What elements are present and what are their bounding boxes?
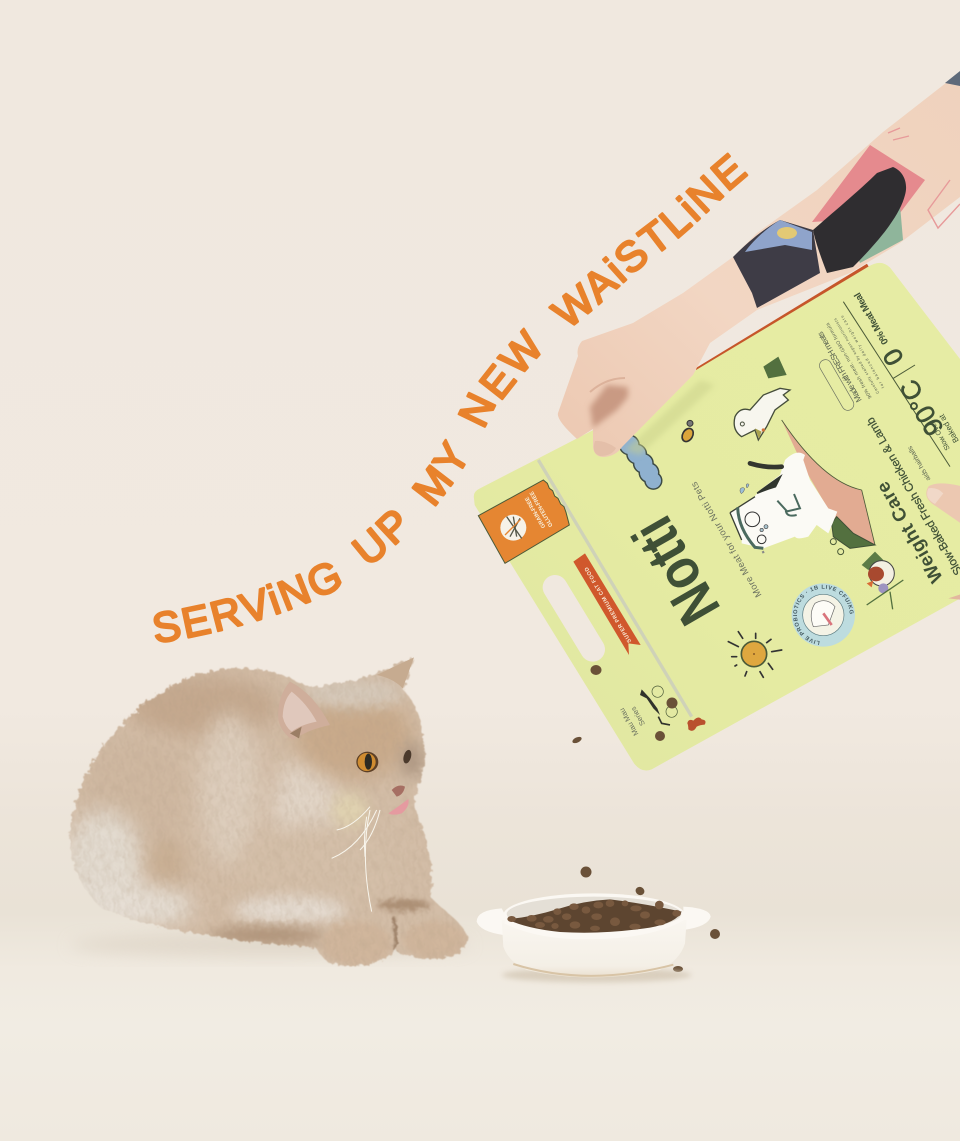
bag body	[474, 263, 960, 770]
illustration: sun	[728, 632, 782, 677]
stat: 90 degrees C: Slow Oven	[929, 418, 952, 451]
ribbon: super premium cat food: SUPER PREMIUM CAT FOOD	[584, 566, 633, 643]
ingredient text: for balanced daily weight care	[839, 314, 885, 389]
food bowl	[477, 893, 711, 982]
small benefit notes: aids hairballs	[906, 444, 932, 482]
ribbon: super premium cat food	[573, 553, 641, 655]
red bone kibble	[687, 717, 706, 731]
ear fold	[290, 727, 302, 738]
cat fur body	[68, 657, 469, 967]
bowl rim	[503, 893, 685, 937]
brand logo: Notti	[619, 506, 733, 636]
inner ear	[283, 692, 317, 732]
illustration: grass tuft	[763, 357, 787, 378]
paw crease	[393, 917, 396, 952]
mascot: Mau Mau eyes	[640, 686, 677, 725]
zip seal	[538, 460, 692, 717]
illustration: blue cloud	[620, 435, 662, 489]
bowl base line	[513, 964, 673, 976]
illustration: bee	[680, 420, 695, 444]
whiskers	[332, 807, 380, 912]
bag of Notti cat food	[474, 262, 960, 770]
knuckle crease	[590, 378, 625, 392]
ingredient text: Made with FRESH meats	[815, 330, 864, 404]
illustration: vegetables	[862, 552, 903, 609]
illustration: peach wedge	[782, 420, 875, 545]
bowl handles	[477, 908, 513, 935]
orange grain-free label: GLUTEN-FREE	[529, 490, 554, 528]
ingredient text: Carefully crafted by expert nutritionists	[832, 317, 880, 395]
orange grain-free label: GRAIN-FREE	[524, 495, 547, 529]
tattoo: green shape	[850, 205, 903, 263]
ingredient text	[815, 314, 885, 413]
tattoo: wrist flowers	[733, 220, 820, 308]
stat: 0% meat meal: 0	[877, 343, 910, 371]
stat: 0% meat meal: 0% Meat Meal	[852, 290, 891, 346]
series text: Mau Mau	[617, 706, 640, 737]
tongue	[388, 799, 409, 815]
illustration: lamb	[734, 388, 790, 440]
cat	[68, 657, 470, 967]
cat floor shadow	[70, 933, 470, 957]
spec rule lines	[843, 302, 950, 467]
ingredient text: 90% fresh meat, non-GMO formula	[825, 321, 874, 400]
nose	[392, 786, 405, 797]
thumb shadow on bag	[625, 380, 715, 455]
fur streak texture	[72, 677, 416, 934]
stat: 0% meat meal	[852, 290, 910, 371]
near eye	[356, 752, 378, 772]
thumbnail right	[927, 488, 943, 504]
far eye	[402, 749, 413, 764]
illustration: white cat	[730, 453, 837, 554]
lower finger	[948, 593, 960, 600]
orange grain-free label	[478, 480, 569, 563]
bowl body	[502, 920, 687, 977]
handle cut-out	[555, 587, 593, 649]
series text: Series	[629, 705, 647, 728]
illustration: flowers	[830, 539, 844, 555]
badge: live probiotics: LIVE PROBIOTICS · 1B LIVE CFU/KG	[793, 584, 854, 645]
bowl shadow	[502, 968, 692, 982]
tattoo: dark mountain	[813, 167, 906, 273]
arm and hand silhouette	[558, 72, 960, 457]
title: curved headline: SERViNG UP MY NEW WAiSTLiNE	[153, 152, 748, 643]
product name: Weight Care	[872, 478, 947, 587]
cat facial features	[278, 657, 414, 912]
arm and hand holding the bag	[558, 71, 960, 457]
near ear	[278, 682, 330, 740]
gap between fingers	[590, 385, 628, 428]
thumb nail	[594, 441, 616, 456]
falling kibble	[571, 665, 720, 972]
stat: 90 degrees C: 90°C	[894, 374, 950, 441]
kibble pile	[507, 899, 682, 933]
tattoo: pink square	[812, 145, 925, 222]
illustration: grass under cat	[832, 517, 875, 548]
red gusset strap	[697, 266, 868, 371]
bowl front rim highlight	[505, 918, 683, 937]
tagline: More Meat for your Notti Pets	[689, 480, 763, 599]
right hand thumb	[926, 483, 960, 525]
wedge top edge	[782, 420, 875, 545]
tattoo: small marks	[888, 128, 960, 228]
far ear	[377, 657, 414, 688]
